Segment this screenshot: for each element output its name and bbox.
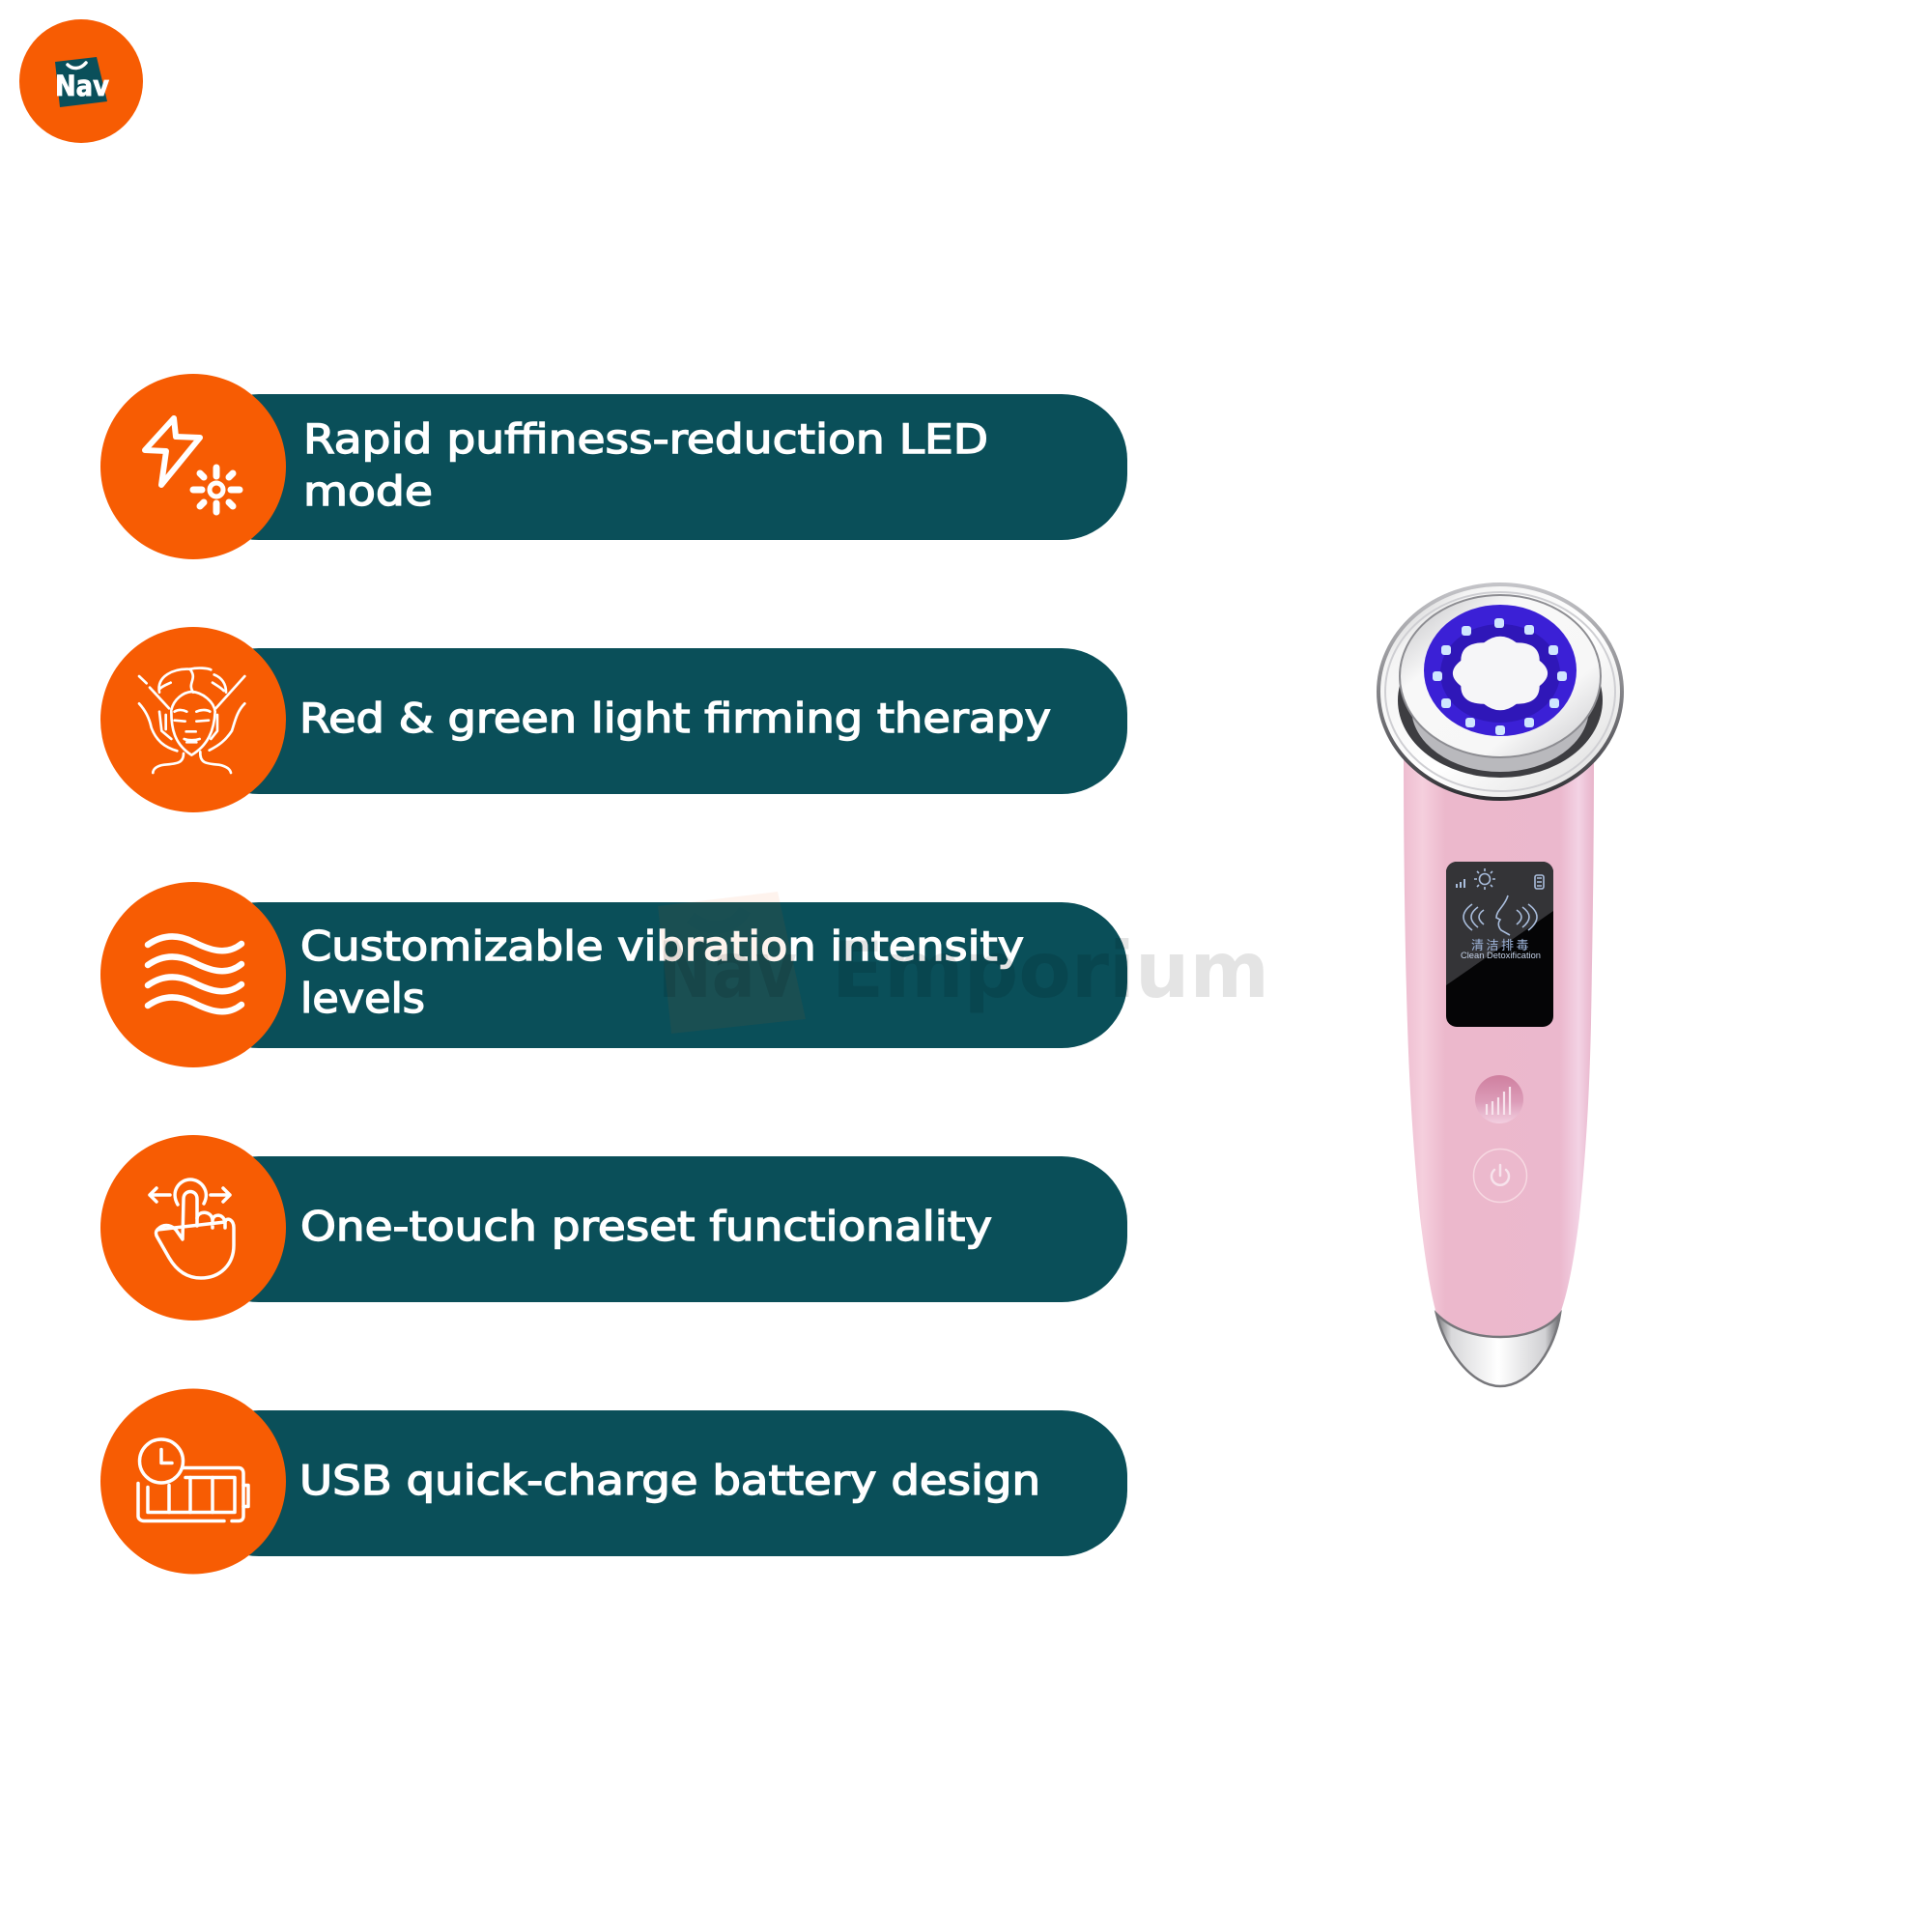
chrome tip bbox=[1436, 1314, 1560, 1386]
white flower centre bbox=[1453, 637, 1548, 710]
feature row 5: USB battery bbox=[100, 1389, 1127, 1575]
blue LED ring bbox=[1424, 605, 1577, 736]
pill 3 bbox=[193, 902, 1127, 1048]
pill 4 bbox=[193, 1156, 1127, 1302]
text 4: One-touch preset functionality bbox=[300, 1203, 992, 1250]
feature row 1: LED mode bbox=[100, 374, 1127, 559]
logo badge: Nav bbox=[19, 19, 143, 143]
LCD screen: 清洁排毒 bbox=[1471, 938, 1531, 952]
LCD screen: Clean Detoxification bbox=[1461, 951, 1541, 961]
pill 2 bbox=[193, 648, 1127, 794]
watermark: Nav Emporium bbox=[658, 892, 1269, 1034]
power button bbox=[1474, 1150, 1526, 1202]
icon circle 3: waves bbox=[100, 882, 286, 1067]
chrome head bbox=[1378, 584, 1622, 799]
LCD screen bbox=[1446, 862, 1553, 1027]
text 5: USB quick-charge battery design bbox=[299, 1457, 1040, 1504]
feature row 3: vibration bbox=[100, 882, 1127, 1067]
text 3: levels bbox=[300, 975, 425, 1022]
product: pink LED facial device bbox=[1378, 584, 1622, 1386]
icon circle 4: touch hand bbox=[100, 1135, 286, 1321]
intensity button bbox=[1475, 1075, 1523, 1123]
text 1: Rapid puffiness-reduction LED bbox=[303, 415, 988, 463]
LEDs bbox=[1433, 618, 1567, 735]
icon circle 5: clock and battery bbox=[100, 1389, 286, 1575]
feature row 4: one-touch bbox=[100, 1135, 1127, 1321]
pill 1 bbox=[193, 394, 1127, 540]
icon circle 1: bolt and sun bbox=[100, 374, 286, 559]
logo badge: Nav: Nav bbox=[55, 70, 109, 102]
pill 5 bbox=[193, 1410, 1127, 1556]
text 2: Red & green light firming therapy bbox=[299, 695, 1051, 742]
watermark: Nav Emporium: Emporium bbox=[832, 925, 1269, 1015]
watermark: Nav Emporium: Nav bbox=[658, 925, 797, 1015]
device body bbox=[1404, 758, 1594, 1337]
text 1: mode bbox=[303, 468, 433, 515]
text 3: Customizable vibration intensity bbox=[300, 923, 1024, 970]
icon circle 2: face massage bbox=[100, 627, 286, 812]
feature row 2: light therapy bbox=[100, 627, 1127, 812]
